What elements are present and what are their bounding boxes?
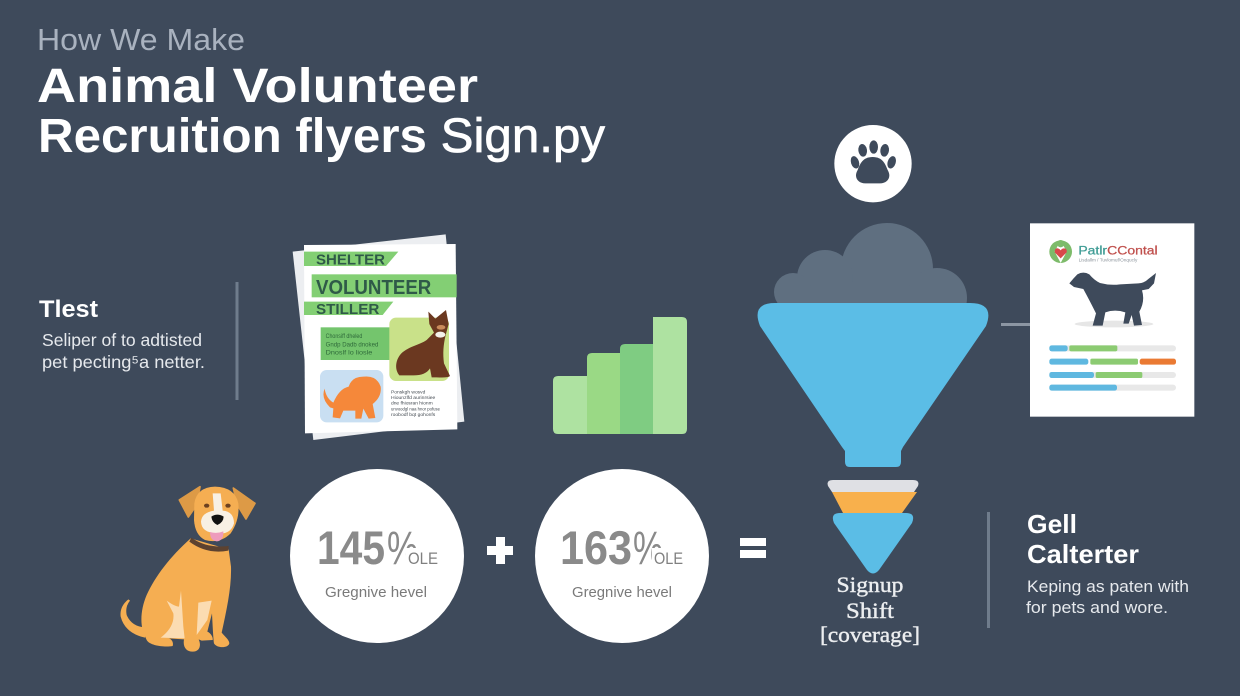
equals sign	[740, 538, 766, 558]
eyes	[204, 504, 209, 508]
cat picture	[389, 310, 450, 381]
unit: OLE	[408, 550, 438, 568]
panel body: Seliper of to adtisted	[42, 330, 202, 350]
kicker: How We Make	[37, 22, 245, 57]
funnel label: Signup	[836, 572, 904, 597]
head	[194, 487, 239, 541]
funnel	[758, 303, 988, 467]
banner: stiller: STILLER	[316, 302, 380, 318]
orange layer	[832, 492, 917, 513]
flyer illustration	[293, 234, 464, 440]
heading line 1: Animal Volunteer	[37, 60, 478, 113]
panel body: Keping as paten with	[1027, 577, 1189, 596]
funnel label: [coverage]	[820, 622, 920, 647]
collar	[189, 538, 229, 552]
percent sign: %	[633, 521, 663, 574]
panel heading: Tlest	[39, 296, 98, 323]
ears	[179, 487, 200, 517]
lower funnel stack	[828, 480, 918, 574]
percent sign: %	[387, 521, 418, 574]
green text block: Gndp Dadb dnoked	[326, 341, 379, 348]
connector line	[1001, 323, 1031, 326]
banner: stiller	[304, 302, 393, 318]
value: 145	[317, 521, 385, 574]
title block	[37, 22, 605, 163]
funnel label: Shift	[846, 598, 894, 623]
flyer small text: Ponskgh wosvd	[391, 389, 426, 394]
green text block: Dnoslf lo liosle	[326, 350, 373, 357]
tail	[120, 599, 145, 638]
card background	[1030, 223, 1194, 417]
banner: volunteer: VOLUNTEER	[316, 276, 431, 299]
banner: shelter: SHELTER	[316, 252, 385, 269]
chest patches	[161, 591, 185, 638]
progress bars	[1049, 345, 1176, 391]
panel heading: Calterter	[1027, 539, 1139, 569]
left text panel	[39, 296, 205, 372]
report card	[1030, 223, 1194, 417]
logo wordmark: PatlrCContal	[1078, 243, 1158, 257]
back sheet	[293, 234, 464, 440]
nose and mouth	[211, 515, 224, 525]
muzzle and blaze	[201, 493, 234, 534]
flyer small text: Hiounzlfd aurinrsiee	[391, 395, 436, 400]
stat circle 2	[535, 469, 709, 643]
flyer small text: dne fhiosran hionm	[391, 401, 433, 406]
heading line 2: Recruition flyers Sign.py	[38, 110, 605, 163]
caption: Gregnive hevel	[325, 584, 427, 601]
flyer small text: unvoodgl naa hnor pofuse	[391, 406, 440, 411]
grey layer	[828, 480, 918, 492]
tongue	[210, 531, 223, 541]
dog silhouette	[1069, 273, 1156, 326]
panel heading: Gell	[1027, 509, 1077, 539]
plus sign	[487, 537, 513, 564]
icon: paw badge	[834, 125, 912, 202]
logo tagline: Lisdallm / Tuvlomuf/Onqucly	[1079, 257, 1138, 262]
stat circle 1	[290, 469, 464, 643]
icon: sitting dog	[120, 487, 255, 652]
logo mark	[1049, 240, 1072, 263]
right text panel	[1026, 509, 1189, 617]
body	[141, 538, 231, 652]
value: 163	[560, 521, 632, 574]
blue triangle	[833, 513, 913, 574]
panel body: for pets and wore.	[1026, 598, 1168, 617]
ground shadow	[1075, 321, 1153, 327]
orange dog picture	[320, 370, 383, 422]
cloud above funnel	[774, 223, 967, 328]
flyer small text: roobodf bqt gohonfs	[391, 412, 436, 417]
caption: Gregnive hevel	[572, 584, 672, 601]
panel body: pet pecting⁵a netter.	[42, 352, 205, 372]
green text block: Chonsiff dheled	[326, 333, 363, 340]
bar chart	[553, 317, 687, 434]
front sheet	[304, 244, 457, 433]
unit: OLE	[654, 550, 683, 568]
green text block	[321, 327, 390, 360]
